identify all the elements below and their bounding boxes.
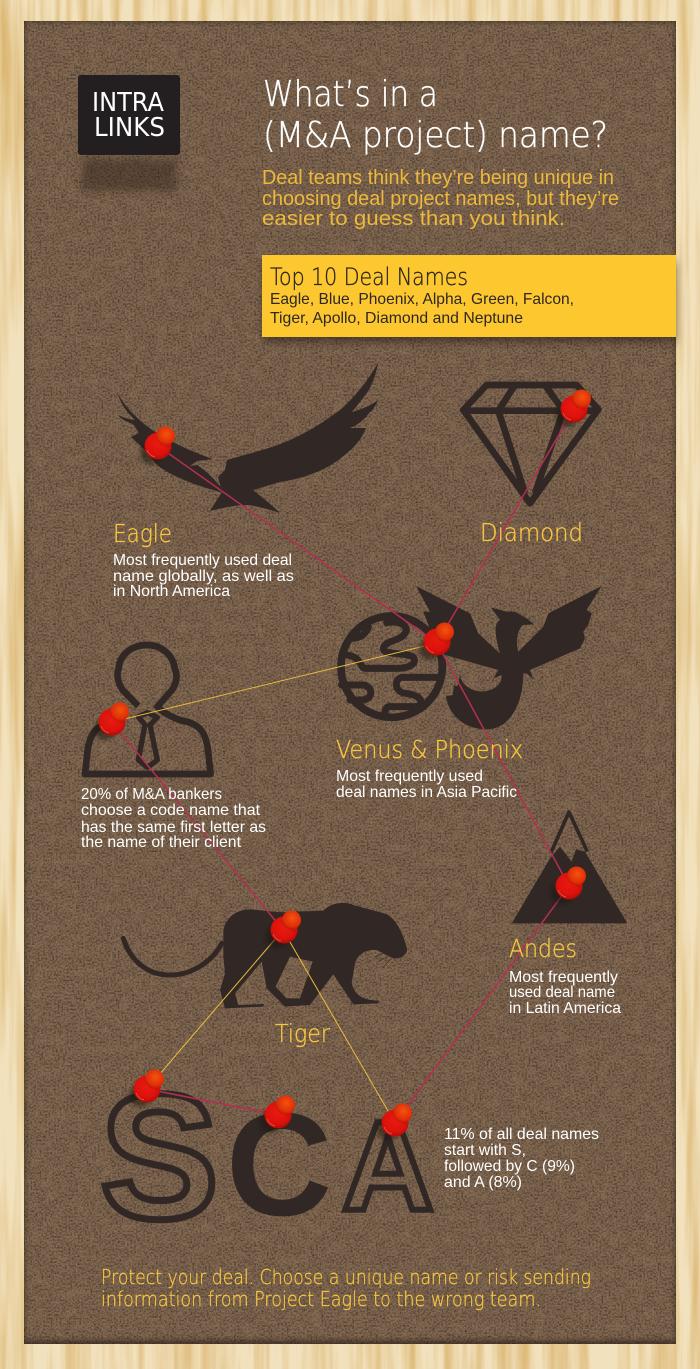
- label: venus and phoenix: [336, 735, 523, 801]
- label: tiger: Tiger: [275, 1019, 331, 1048]
- pin: andes: [551, 866, 586, 904]
- label: andes: used deal name: [509, 984, 615, 1001]
- icon: eagle: [117, 363, 378, 513]
- label: andes: in Latin America: [509, 1000, 621, 1017]
- title: [263, 74, 608, 156]
- text: bankers statistic: the name of their client: [81, 834, 242, 851]
- text: letter statistic: start with S,: [444, 1142, 526, 1159]
- logo: Intralinks: LINKS: [94, 113, 165, 143]
- text: bankers statistic: [81, 786, 266, 851]
- pin: venus and phoenix: [419, 622, 454, 660]
- label: eagle: in North America: [113, 583, 230, 600]
- icon: letters S C A: C: [226, 1083, 332, 1247]
- logo: Intralinks: INTRA: [92, 88, 164, 118]
- title: What’s in a: [263, 74, 438, 115]
- footer call to action: information from Project Eagle to the wrong team.: [101, 1287, 541, 1311]
- pin: businessman: [94, 702, 129, 740]
- intro text: choosing deal project names, but they’re: [262, 187, 619, 210]
- label: andes: [509, 934, 621, 1017]
- label: andes: Most frequently: [509, 969, 618, 986]
- icon: phoenix: [416, 586, 602, 729]
- logo: Intralinks: [78, 75, 180, 191]
- label: eagle: Most frequently used deal: [113, 552, 292, 569]
- pin: tiger: [266, 910, 301, 948]
- panel: top 10 deal names: Tiger, Apollo, Diamond and Neptune: [270, 310, 523, 327]
- label: eagle: name globally, as well as: [113, 568, 294, 585]
- panel: top 10 deal names: Eagle, Blue, Phoenix, Alpha, Green, Falcon,: [270, 291, 574, 308]
- label: andes: Andes: [509, 934, 577, 963]
- pin: letter C: [260, 1096, 295, 1133]
- label: venus and phoenix: Venus & Phoenix: [336, 735, 523, 764]
- footer call to action: Protect your deal. Choose a unique name or risk sending: [101, 1265, 591, 1289]
- icon: planet venus: [341, 616, 442, 717]
- title: (M&A project) name?: [263, 115, 608, 156]
- label: eagle: Eagle: [113, 519, 172, 548]
- text: bankers statistic: has the same first letter as: [81, 819, 266, 836]
- icon: diamond: [463, 385, 598, 503]
- label: venus and phoenix: Most frequently used: [336, 768, 483, 785]
- strings: crimson connections: [112, 409, 574, 1123]
- text: letter statistic: followed by C (9%): [444, 1158, 575, 1175]
- text: letter statistic: [444, 1126, 599, 1191]
- text: letter statistic: and A (8%): [444, 1174, 522, 1191]
- pin: letter S: [129, 1070, 164, 1107]
- pin: diamond: [556, 390, 591, 427]
- icon: mountain: [512, 812, 627, 923]
- intro text: Deal teams think they’re being unique in: [262, 166, 614, 189]
- text: letter statistic: 11% of all deal names: [444, 1126, 599, 1143]
- pin: letter A: [377, 1104, 412, 1141]
- footer call to action: [101, 1265, 591, 1311]
- icon: letters S C A: S: [100, 1057, 219, 1256]
- label: diamond: Diamond: [480, 518, 583, 547]
- panel: top 10 deal names: Top 10 Deal Names: [270, 263, 468, 291]
- intro text: [262, 166, 619, 230]
- label: eagle: [113, 519, 294, 600]
- icon: letters S C A: [100, 1057, 434, 1256]
- text: bankers statistic: 20% of M&A bankers: [81, 786, 222, 803]
- panel: top 10 deal names: [262, 255, 676, 342]
- strings: yellow connections: [112, 643, 437, 1123]
- intro text: easier to guess than you think.: [262, 207, 565, 230]
- icon: letters S C A: A: [342, 1095, 434, 1237]
- pin: eagle: [140, 426, 175, 464]
- icon: tiger: [123, 903, 407, 1008]
- text: bankers statistic: choose a code name that: [81, 802, 261, 819]
- icon: businessman: [85, 645, 211, 774]
- label: venus and phoenix: deal names in Asia Pacific: [336, 784, 517, 801]
